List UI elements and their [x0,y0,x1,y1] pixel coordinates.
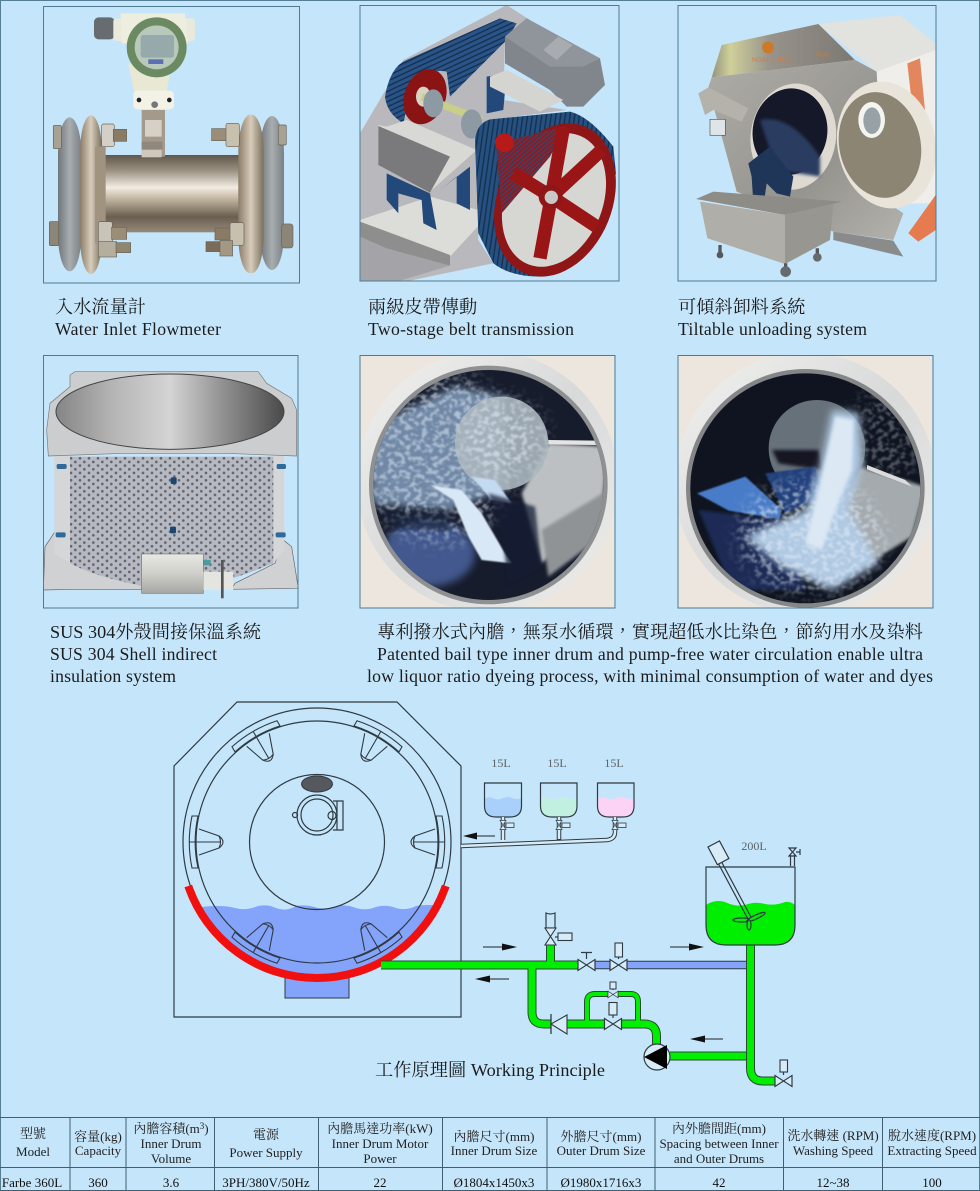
flowmeter stem [142,110,165,157]
perforated body [70,457,273,591]
control valve top [610,943,627,971]
manual valve [578,952,595,971]
caption: water inlet flowmeter: Water Inlet Flowmeter [55,319,221,339]
drum opening ellipse [56,374,284,449]
motor mount [490,70,563,112]
drum hub circle [250,774,384,910]
machine logo: NG&I SHING [752,57,791,64]
caption: two-stage belt transmission: 兩級皮帶傳動 [368,297,477,317]
green circulation pipes [381,945,775,1081]
panel frame [44,356,298,608]
column: spacing [659,1121,779,1190]
machine housing [174,702,461,1017]
water sump [285,978,349,998]
column: power supply [222,1127,310,1190]
column: capacity [74,1129,122,1190]
flowmeter pipe [98,155,240,232]
panel: drum photo with clothes lifted [357,351,618,612]
shell side strips [54,456,284,563]
column: model: 型號 [20,1126,46,1141]
column: outer drum size: Ø1980x1716x3 [561,1175,641,1190]
column: inner drum size: 內膽尺寸(mm) [454,1129,534,1144]
dye tank 2: 15L [547,756,567,770]
bypass valve [608,982,618,998]
orange lower side [908,195,936,242]
flange bolts [49,123,293,257]
column: motor power: 內膽馬達功率(kW) [327,1121,433,1136]
caption: water inlet flowmeter: 入水流量計 [55,297,146,317]
column: inner drum volume: ) [204,1121,209,1136]
column: washing speed: 洗水轉速 (RPM) [787,1128,879,1143]
large pulley belt [475,112,616,277]
column: washing speed: 12~38 [816,1175,850,1190]
mixing tank 200L: 200L [741,839,767,853]
table grid [0,1117,980,1191]
machine white cover [818,15,936,72]
dye manifold pipe [461,817,615,846]
caption: SUS 304 shell: SUS 304外殼間接保溫系統 [50,622,262,642]
large pulley wheel [494,123,616,277]
water in drum [202,905,433,974]
right flanges [238,115,284,273]
column: model [2,1126,62,1190]
caption: tiltable unloading system: 可傾斜卸料系統 [678,297,806,317]
machine logo [752,41,829,64]
column: spacing: and Outer Drums [674,1151,764,1166]
diagram: working principle [174,702,800,1087]
caption: water inlet flowmeter [55,297,221,339]
column: extracting speed: 100 [922,1175,942,1190]
motor [505,18,605,107]
small pulley [403,69,447,124]
chute [698,87,748,122]
column: spacing: 42 [712,1175,726,1190]
dye tank 3 [598,756,634,817]
check valve [551,1014,567,1034]
column: inner drum size: Ø1804x1450x3 [454,1175,534,1190]
panel: tiltable unloading machine photo [678,6,948,281]
panel frame [44,6,300,283]
column: capacity: 360 [88,1175,108,1190]
column: capacity: Capacity [75,1143,122,1158]
flow arrows [463,832,723,1042]
column: inner drum volume [133,1121,209,1190]
shell base plates [43,532,298,590]
column: inner drum volume: 3 [200,1121,205,1131]
column: inner drum volume: 3.6 [163,1175,180,1190]
porthole surround [360,356,614,608]
column: motor power: 22 [374,1175,386,1190]
machine logo: Wash [816,53,829,59]
column: power supply: 3PH/380V/50Hz [222,1175,310,1190]
dye tank 1 [484,756,522,817]
bracket plate [378,120,477,192]
panel: drum photo with water falling [675,353,936,614]
porthole surround [678,356,932,608]
caption: patented drum: 專利撥水式內膽，無泵水循環，實現超低水比染色，節約用水及染料 [377,621,923,642]
arrow: to tank [670,944,704,950]
panel: water inlet flowmeter photo [44,6,300,283]
panel frame [360,356,615,608]
blue frame legs [387,73,507,230]
column: outer drum size [557,1129,646,1190]
diagram title: 工作原理圖 Working Principle [375,1060,605,1080]
machine skid [833,232,903,257]
column: inner drum volume: Volume [151,1151,191,1166]
caption: two-stage belt transmission: Two-stage belt transmission [368,319,574,339]
flowmeter transmitter [94,13,195,109]
column: washing speed [787,1128,879,1190]
filter element [302,776,332,792]
dye tank 2 [540,756,577,817]
caption: patented drum: Patented bail type inner drum and pump-free water circulation enable ultra [377,644,923,664]
dye valves [500,820,626,830]
porthole ring [357,351,618,612]
caption: SUS 304 shell: SUS 304 Shell indirect [50,644,217,664]
column: power supply: 電源 [253,1127,280,1142]
top flange plate [47,372,297,456]
column: washing speed: Washing Speed [793,1143,874,1158]
panel frame [678,6,936,281]
inner drum circle [196,721,438,963]
machine back plate [360,5,567,281]
orange stripe [907,58,925,110]
main loop valve [604,1002,622,1030]
column: model: Model [16,1144,50,1159]
caption: two-stage belt transmission [368,297,574,339]
dye tanks [484,756,634,817]
panel: two-stage belt transmission drawing [360,5,620,282]
specification table [0,1117,980,1191]
column: inner drum size [451,1129,538,1190]
drum opening [750,84,836,190]
column: capacity: 容量(kg) [74,1129,122,1144]
arrow: pump feed [690,1036,723,1042]
air valve on branch [544,913,572,945]
arrow: dye inflow [463,832,495,840]
pump [644,1044,670,1070]
caption: tiltable unloading system [678,297,867,339]
column: motor power: Inner Drum Motor [332,1136,429,1151]
left flanges [58,115,106,274]
door ring [292,795,343,835]
stirrer [708,841,766,930]
arrow: return left [475,976,509,982]
blue fittings [56,464,286,565]
column: extracting speed [887,1128,977,1190]
column: inner drum size: Inner Drum Size [451,1143,538,1158]
outlet box [142,554,233,598]
column: inner drum volume: Inner Drum [140,1136,202,1151]
outer drum circle [183,708,451,976]
drum water and clothes [362,370,608,587]
steel cart [696,192,842,277]
column: motor power: Power [363,1151,397,1166]
column: inner drum volume: 內膽容積(m [133,1121,200,1136]
machine face [708,60,903,240]
drain valve [775,1060,792,1087]
column: outer drum size: Outer Drum Size [557,1143,646,1158]
caption: patented drum [367,621,933,686]
drum water and clothes [697,390,925,593]
mixing tank 200L [706,839,800,945]
panel: SUS 304 shell drawing [43,356,298,608]
panel frame [678,356,933,608]
column: spacing: Spacing between Inner [659,1136,779,1151]
door [836,82,936,208]
bearing shaft [422,89,482,139]
column: spacing: 內外膽間距(mm) [672,1121,766,1136]
dye tank 1: 15L [491,756,511,770]
caption: tiltable unloading system: Tiltable unloading system [678,319,867,339]
column: outer drum size: 外膽尺寸(mm) [561,1129,641,1144]
drum paddles [189,718,445,966]
blue return pipes [595,961,746,969]
panel frame [360,6,619,281]
control panel [710,119,725,135]
dye tank 3: 15L [604,756,624,770]
arrow: outflow right [483,944,517,950]
base shelf [360,197,490,257]
column: model: Farbe 360L [2,1175,62,1190]
caption: SUS 304 shell: insulation system [50,666,176,686]
clothes [748,147,794,197]
column: motor power [327,1121,433,1190]
column: extracting speed: 脫水速度(RPM) [888,1128,976,1143]
porthole ring [675,353,936,614]
column: power supply: Power Supply [229,1145,303,1160]
machine steel hood [712,24,855,77]
column: extracting speed: Extracting Speed [887,1143,977,1158]
top belt [385,18,517,123]
heated jacket arc [188,886,446,978]
caption: SUS 304 shell [50,622,262,686]
vent valve [789,848,800,866]
caption: patented drum: low liquor ratio dyeing process, with minimal consumption of water and dyes [367,666,933,686]
